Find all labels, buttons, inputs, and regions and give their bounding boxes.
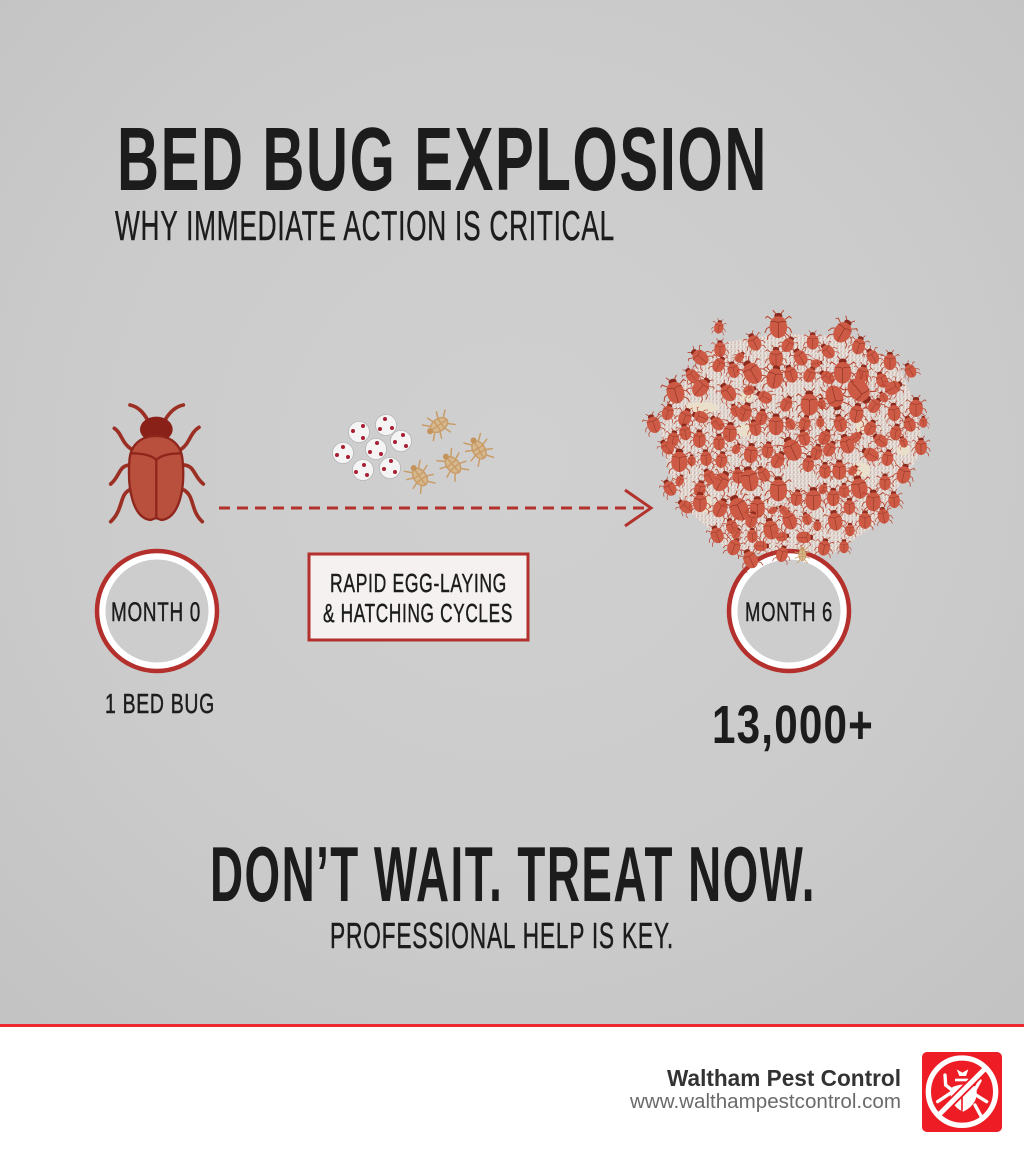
month 0 badge: MONTH 0 — [111, 597, 201, 627]
month 0 badge — [97, 551, 217, 671]
month 6 badge: MONTH 6 — [745, 597, 833, 627]
icon: single bed bug — [111, 405, 203, 522]
rapid egg-laying callout — [309, 554, 528, 640]
website: www.walthampestcontrol.com — [629, 1091, 901, 1113]
hatchlings — [402, 407, 496, 495]
rapid egg-laying callout: RAPID EGG-LAYING — [330, 568, 507, 598]
large bugs — [640, 310, 930, 558]
rapid egg-laying callout: & HATCHING CYCLES — [323, 598, 513, 628]
call to action subtext: PROFESSIONAL HELP IS KEY. — [330, 915, 674, 956]
eggs — [332, 414, 412, 480]
label: 1 bed bug: 1 BED BUG — [105, 688, 215, 719]
label: 13,000+: 13,000+ — [712, 695, 874, 755]
small bugs — [654, 318, 930, 559]
company name: Waltham Pest Control — [667, 1065, 901, 1091]
swarm overlap on badge — [735, 542, 810, 573]
footer — [0, 1024, 1024, 1154]
dashed arrow — [219, 490, 651, 526]
subtitle: WHY IMMEDIATE ACTION IS CRITICAL — [115, 202, 615, 249]
bug swarm — [640, 310, 930, 559]
month 6 badge — [729, 551, 849, 671]
icon: no bugs logo — [922, 1052, 1002, 1132]
